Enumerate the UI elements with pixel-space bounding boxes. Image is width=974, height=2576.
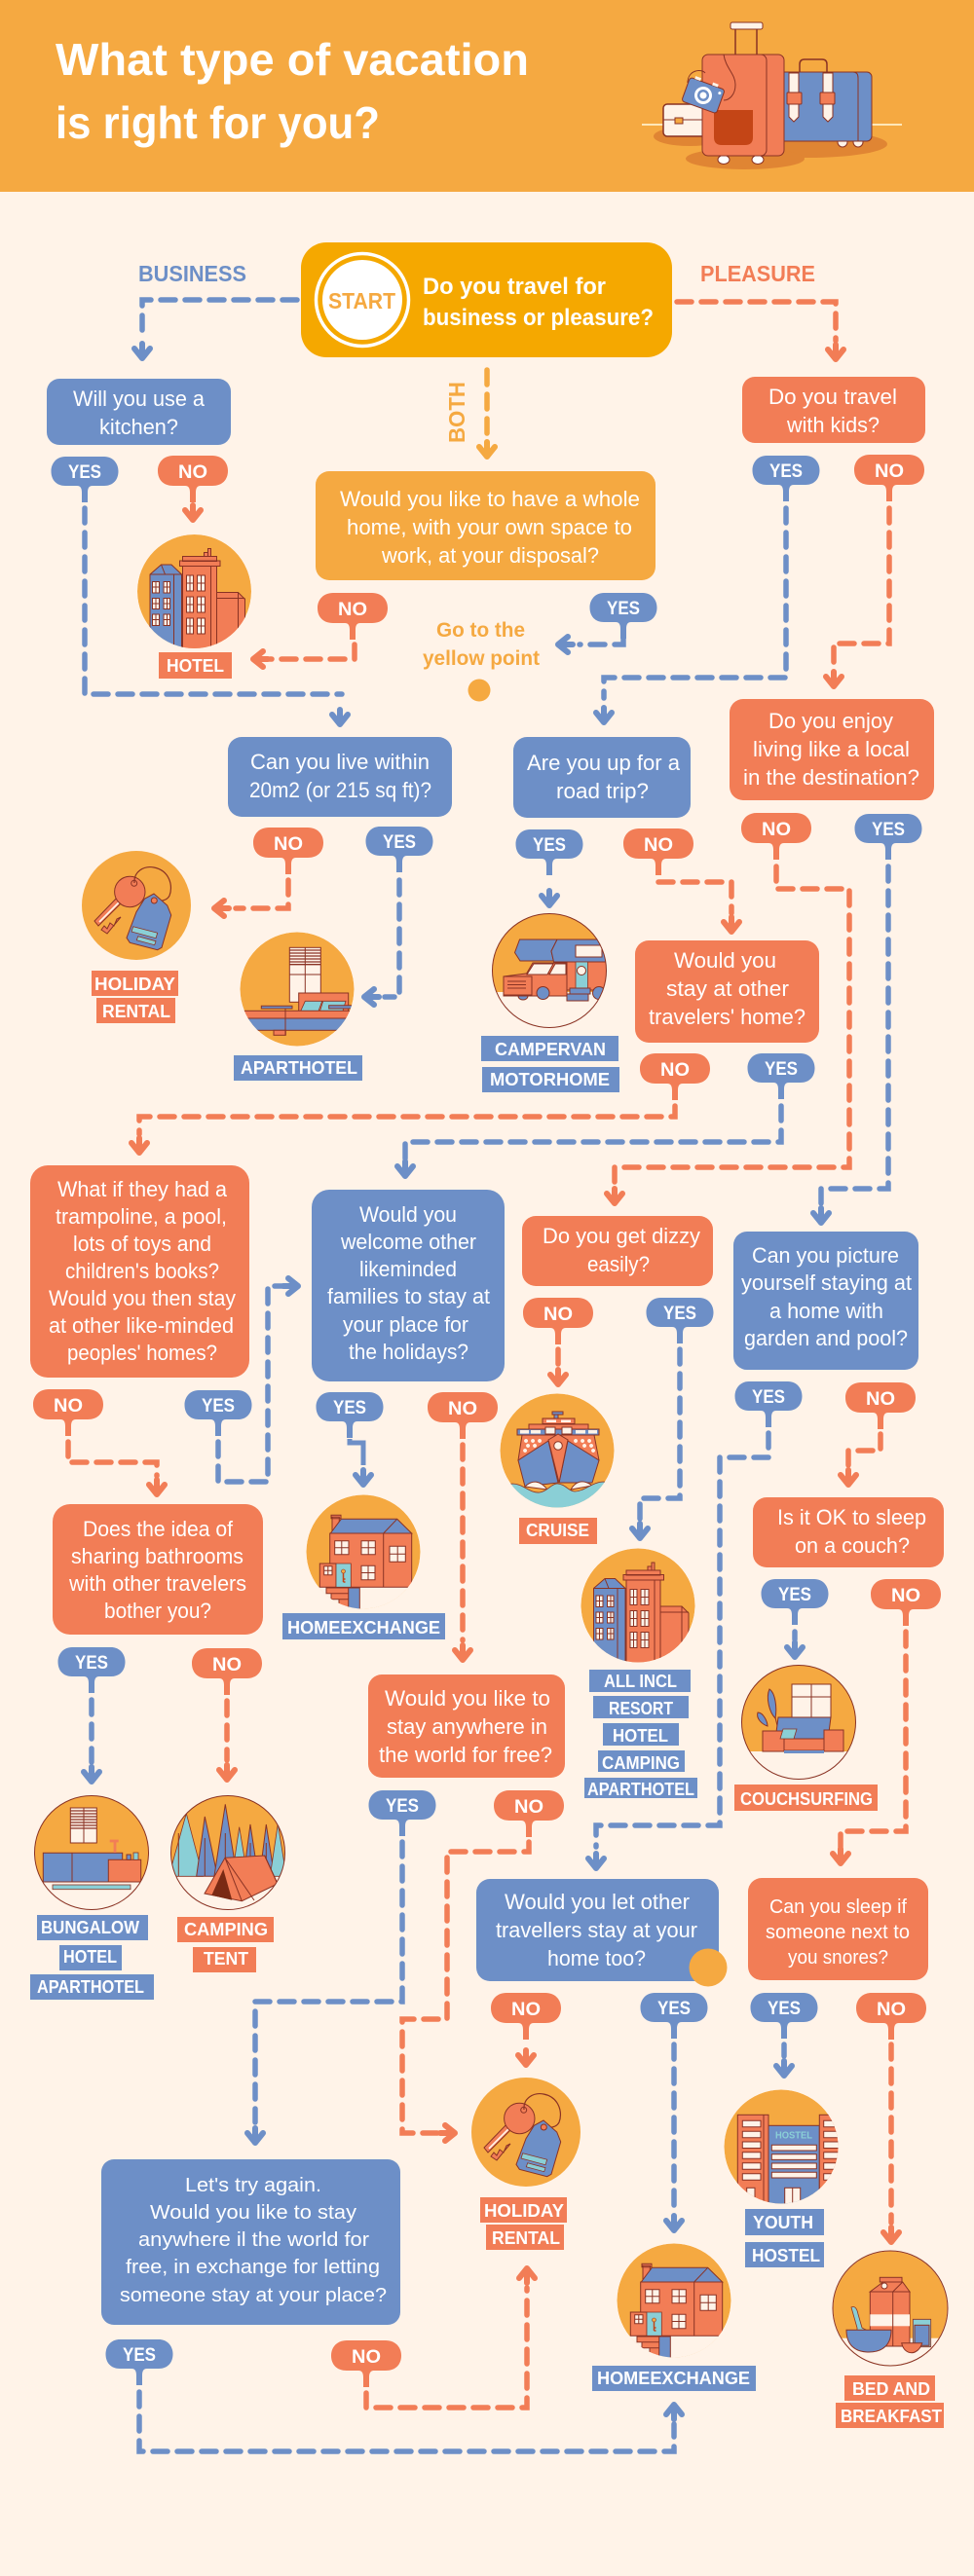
label: holiday rental bbox=[92, 971, 178, 1023]
question: trampoline: Would you then stay bbox=[49, 1286, 236, 1310]
arrow: 20m2 yes bbox=[364, 880, 399, 1005]
question: kids bbox=[742, 377, 925, 443]
label: bungalow list: BUNGALOW bbox=[41, 1917, 139, 1937]
question: welcome families: welcome other bbox=[340, 1230, 476, 1254]
question: snores: Can you sleep if bbox=[769, 1895, 907, 1918]
start text bbox=[423, 274, 654, 331]
label: youth hostel bbox=[745, 2209, 824, 2267]
question: try again: anywhere il the world for bbox=[138, 2228, 369, 2251]
question: stay for free: Would you like to bbox=[385, 1686, 550, 1711]
header band bbox=[0, 0, 974, 192]
arrow: trampoline no bbox=[68, 1442, 165, 1494]
bubble: garden yes bbox=[734, 1381, 803, 1427]
question: whole home: home, with your own space to bbox=[347, 515, 632, 539]
arrow: free yes bbox=[247, 1842, 402, 2143]
bubble: 20m2 yes bbox=[366, 827, 432, 872]
question: let travellers stay: travellers stay at your bbox=[496, 1918, 697, 1942]
question: garden and pool: garden and pool? bbox=[744, 1326, 908, 1350]
arrow: enjoy no bbox=[607, 866, 849, 1203]
bubble: snore yes bbox=[750, 1993, 818, 2039]
arrow: bathrooms yes bbox=[84, 1700, 99, 1782]
arrow: couch no bbox=[833, 1632, 906, 1863]
arrow: let stay no bbox=[518, 2050, 534, 2065]
arrow: road trip yes bbox=[542, 891, 557, 905]
bubble: 20m2 no bbox=[253, 828, 323, 874]
question: garden and pool: Can you picture bbox=[752, 1243, 899, 1268]
arrow: dizzy yes bbox=[632, 1349, 680, 1538]
icon: bungalow bbox=[33, 1795, 150, 1911]
bubble: travelers no bbox=[640, 1053, 710, 1100]
arrow: travelers home yes bbox=[397, 1106, 781, 1176]
bubble: garden no bbox=[845, 1382, 916, 1429]
question: snores bbox=[748, 1878, 928, 1980]
arrow: garden no bbox=[841, 1434, 880, 1485]
label: bungalow list bbox=[30, 1915, 154, 2000]
question: dizzy: Do you get dizzy bbox=[543, 1224, 700, 1248]
label: holiday rental bbox=[480, 2197, 567, 2250]
label: bed and breakfast: BED AND bbox=[852, 2378, 930, 2399]
icon: luggage bbox=[642, 22, 902, 169]
icon: keys bbox=[82, 851, 191, 960]
bubble: dizzy no bbox=[523, 1298, 593, 1344]
question: let travellers stay: home too? bbox=[547, 1946, 646, 1970]
question: shared bathrooms bbox=[53, 1504, 263, 1635]
question: couch: on a couch? bbox=[795, 1533, 910, 1558]
question: live like a local: Do you enjoy bbox=[768, 709, 893, 733]
question: try again: free, in exchange for letting bbox=[126, 2256, 380, 2278]
bubble: whole home yes bbox=[590, 593, 656, 639]
bubble: road yes bbox=[516, 829, 582, 875]
label: all incl list: APARTHOTEL bbox=[587, 1779, 694, 1799]
title: What type of vacation bbox=[56, 34, 529, 85]
heading: both: BOTH bbox=[444, 382, 469, 443]
question: garden and pool bbox=[733, 1232, 918, 1370]
question: kids: with kids? bbox=[786, 413, 880, 437]
bubble: let stay no bbox=[491, 1993, 561, 2040]
label: hotel bbox=[159, 652, 232, 679]
icon: youth hostel bbox=[725, 2089, 841, 2209]
arrow: pleasure bbox=[677, 302, 843, 359]
label: all incl list: HOTEL bbox=[613, 1725, 668, 1746]
question: live like a local: living like a local bbox=[753, 737, 910, 761]
question: welcome families: families to stay at bbox=[327, 1284, 490, 1308]
question: trampoline: trampoline, a pool, bbox=[56, 1204, 227, 1229]
question: shared bathrooms: bother you? bbox=[104, 1599, 211, 1623]
arrow: try again yes bbox=[139, 2392, 682, 2451]
question: try again: someone stay at your place? bbox=[120, 2284, 387, 2306]
question: stay for free bbox=[368, 1674, 565, 1778]
question: couch: Is it OK to sleep bbox=[777, 1505, 926, 1529]
bubble: trampoline yes bbox=[185, 1390, 251, 1436]
question: road trip bbox=[513, 737, 691, 818]
arrow: travelers home no bbox=[131, 1106, 675, 1153]
arrow: trampoline yes bbox=[218, 1278, 298, 1482]
start badge bbox=[316, 253, 409, 347]
arrow: bathrooms no bbox=[219, 1701, 235, 1780]
label: holiday rental: RENTAL bbox=[102, 1001, 170, 1021]
question: road trip: road trip? bbox=[556, 779, 649, 803]
question: trampoline: lots of toys and bbox=[73, 1232, 211, 1256]
question: 20m2: Can you live within bbox=[250, 750, 430, 774]
question: trampoline: children's books? bbox=[65, 1259, 219, 1283]
arrow: welcome no bbox=[455, 1445, 470, 1660]
icon: campervan bbox=[491, 913, 608, 1031]
question: welcome families bbox=[312, 1190, 505, 1381]
bubble: snore no bbox=[856, 1993, 926, 2040]
label: holiday rental: HOLIDAY bbox=[94, 974, 176, 994]
arrow: whole home yes bbox=[558, 637, 623, 652]
bubble: free yes bbox=[368, 1790, 436, 1836]
question: other travelers home: travelers' home? bbox=[649, 1005, 805, 1029]
question: live like a local: in the destination? bbox=[743, 765, 919, 790]
callout: go to the yellow point: yellow point bbox=[423, 647, 540, 670]
label: hotel: HOTEL bbox=[167, 655, 224, 676]
icon: hotel bbox=[137, 534, 251, 650]
label: holiday rental: RENTAL bbox=[492, 2227, 560, 2248]
question: shared bathrooms: with other travelers bbox=[68, 1571, 246, 1596]
question: garden and pool: a home with bbox=[769, 1299, 883, 1323]
bubble: local yes bbox=[855, 814, 921, 860]
icon: home exchange bbox=[616, 2243, 732, 2360]
label: bungalow list: HOTEL bbox=[63, 1946, 117, 1967]
bubble: try again yes bbox=[105, 2339, 173, 2385]
arrow: business bbox=[134, 300, 297, 358]
bubble: whole home no bbox=[318, 593, 388, 640]
bubble: welcome no bbox=[428, 1392, 498, 1439]
start badge: START bbox=[328, 288, 395, 313]
question: welcome families: the holidays? bbox=[349, 1340, 468, 1364]
label: all incl list: ALL INCL bbox=[604, 1671, 677, 1691]
arrow: snore no bbox=[883, 2044, 899, 2242]
title bbox=[56, 34, 529, 148]
icon: yellow point bbox=[690, 1949, 727, 1986]
title: is right for you? bbox=[56, 97, 380, 148]
question: other travelers home: Would you bbox=[674, 948, 776, 973]
icon: aparthotel bbox=[239, 933, 356, 1046]
question: welcome families: your place for bbox=[343, 1312, 468, 1337]
icon: couch bbox=[740, 1665, 857, 1781]
question: dizzy: easily? bbox=[587, 1252, 650, 1276]
bubble: trampoline no bbox=[33, 1389, 103, 1436]
bubble: kids no bbox=[854, 455, 924, 501]
bubble: dizzy yes bbox=[647, 1298, 713, 1343]
label: aparthotel: APARTHOTEL bbox=[241, 1057, 357, 1078]
question: kids: Do you travel bbox=[768, 385, 897, 409]
arrow: kitchen no bbox=[185, 505, 201, 520]
arrow: kids yes bbox=[596, 508, 786, 722]
question: kitchen: kitchen? bbox=[99, 415, 178, 439]
bubble: road no bbox=[623, 828, 693, 875]
question: garden and pool: yourself staying at bbox=[741, 1270, 912, 1295]
question: try again: Let's try again. bbox=[185, 2174, 321, 2196]
arrow: road trip no bbox=[658, 882, 739, 932]
question: other travelers home: stay at other bbox=[666, 976, 789, 1001]
bubble: let stay yes bbox=[641, 1993, 707, 2039]
bubble: couch no bbox=[871, 1579, 941, 1626]
label: all incl list bbox=[584, 1670, 697, 1799]
label: campervan motorhome bbox=[481, 1036, 619, 1092]
bubble: bathrooms yes bbox=[58, 1647, 125, 1693]
answer bubbles bbox=[33, 455, 941, 2387]
bubble: try again no bbox=[331, 2340, 401, 2387]
question: kitchen bbox=[47, 379, 231, 445]
bubble: local no bbox=[741, 813, 811, 860]
arrow: kitchen yes bbox=[85, 508, 348, 724]
question: snores: someone next to bbox=[766, 1921, 910, 1943]
icon: keys holiday rental bbox=[471, 2078, 581, 2187]
label: holiday rental: HOLIDAY bbox=[484, 2200, 565, 2221]
panel: start question bbox=[301, 242, 672, 357]
heading: pleasure: PLEASURE bbox=[700, 261, 815, 286]
bubble: kitchen no bbox=[158, 456, 228, 502]
label: homeexchange: HOMEEXCHANGE bbox=[287, 1617, 440, 1638]
start text: Do you travel for bbox=[423, 274, 606, 300]
label: camping tent: CAMPING bbox=[184, 1919, 268, 1939]
label: campervan motorhome: MOTORHOME bbox=[490, 1069, 610, 1089]
arrow: dizzy no bbox=[550, 1349, 566, 1384]
arrow: couch yes bbox=[787, 1632, 803, 1657]
question: try again bbox=[101, 2159, 400, 2325]
question: whole home: Would you like to have a whole bbox=[340, 487, 640, 511]
heading: business: BUSINESS bbox=[138, 261, 246, 286]
question: let travellers stay: Would you let other bbox=[505, 1890, 690, 1914]
label: campervan motorhome: CAMPERVAN bbox=[495, 1039, 606, 1059]
arrow: try again no bbox=[366, 2268, 535, 2408]
icon: bed and breakfast bbox=[832, 2251, 949, 2368]
question: trampoline: What if they had a bbox=[57, 1177, 228, 1201]
arrow: garden yes bbox=[588, 1433, 768, 1868]
question: road trip: Are you up for a bbox=[527, 751, 681, 775]
start text: business or pleasure? bbox=[423, 305, 654, 331]
question: shared bathrooms: sharing bathrooms bbox=[71, 1544, 244, 1568]
icon: camping tent bbox=[169, 1795, 286, 1911]
label: cruise bbox=[519, 1518, 597, 1544]
label: homeexchange: HOMEEXCHANGE bbox=[597, 2368, 750, 2388]
arrow: both bbox=[479, 370, 495, 457]
icon: youth hostel: HOSTEL bbox=[775, 2130, 813, 2142]
arrow: enjoy yes bbox=[813, 866, 888, 1223]
question: let travellers stay bbox=[476, 1879, 719, 1981]
question: dizzy bbox=[522, 1216, 713, 1286]
arrow: 20m2 no bbox=[214, 880, 288, 916]
question: stay for free: the world for free? bbox=[379, 1743, 552, 1767]
question: welcome families: likeminded bbox=[359, 1257, 457, 1281]
bubble: free no bbox=[494, 1790, 564, 1837]
arrow: snore yes bbox=[776, 2044, 792, 2076]
label: camping tent bbox=[177, 1917, 274, 1972]
arrow: free no bbox=[402, 1842, 529, 2141]
label: bed and breakfast: BREAKFAST bbox=[841, 2406, 943, 2426]
bubble: couch yes bbox=[762, 1579, 828, 1625]
bubble: kitchen yes bbox=[51, 457, 119, 502]
arrow: welcome yes bbox=[350, 1439, 371, 1485]
label: cruise: CRUISE bbox=[526, 1520, 589, 1540]
question: shared bathrooms: Does the idea of bbox=[83, 1517, 234, 1541]
label: all incl list: RESORT bbox=[609, 1698, 674, 1718]
question: trampoline: peoples' homes? bbox=[67, 1341, 217, 1365]
question: try again: Would you like to stay bbox=[150, 2201, 357, 2224]
question: other travelers home bbox=[635, 940, 819, 1043]
arrow: kids no bbox=[826, 508, 889, 686]
label: couchsurfing: COUCHSURFING bbox=[740, 1788, 873, 1809]
question: trampoline: at other like-minded bbox=[49, 1313, 234, 1338]
label: youth hostel: YOUTH bbox=[753, 2212, 813, 2232]
question: kitchen: Will you use a bbox=[73, 386, 206, 411]
callout: go to the yellow point bbox=[423, 619, 540, 701]
bubble: travelers yes bbox=[748, 1053, 814, 1099]
question: couch bbox=[753, 1497, 944, 1567]
question: whole home: work, at your disposal? bbox=[381, 543, 599, 568]
arrow: whole home no bbox=[253, 644, 355, 667]
label: bed and breakfast bbox=[836, 2375, 944, 2428]
question: trampoline bbox=[30, 1165, 249, 1378]
question: 20m2: 20m2 (or 215 sq ft)? bbox=[249, 778, 431, 802]
label: bungalow list: APARTHOTEL bbox=[37, 1976, 144, 1997]
label: camping tent: TENT bbox=[204, 1948, 249, 1969]
label: youth hostel: HOSTEL bbox=[752, 2245, 820, 2265]
icon: hotel resort bbox=[581, 1548, 695, 1664]
icon: cruise ship bbox=[499, 1394, 616, 1509]
bubble: welcome yes bbox=[316, 1392, 384, 1438]
label: all incl list: CAMPING bbox=[602, 1752, 680, 1773]
bubble: bathrooms no bbox=[192, 1648, 262, 1695]
question: whole home bbox=[316, 471, 656, 580]
question: live like a local bbox=[730, 699, 934, 800]
bubble: kids yes bbox=[752, 456, 820, 501]
question: stay for free: stay anywhere in bbox=[387, 1714, 547, 1739]
icon: home exchange bbox=[305, 1495, 422, 1611]
arrow: let stay yes bbox=[666, 2044, 682, 2230]
callout: go to the yellow point: Go to the bbox=[436, 619, 525, 642]
question: welcome families: Would you bbox=[359, 1202, 457, 1227]
question: snores: you snores? bbox=[788, 1946, 888, 1969]
question: 20m2 bbox=[228, 737, 452, 817]
